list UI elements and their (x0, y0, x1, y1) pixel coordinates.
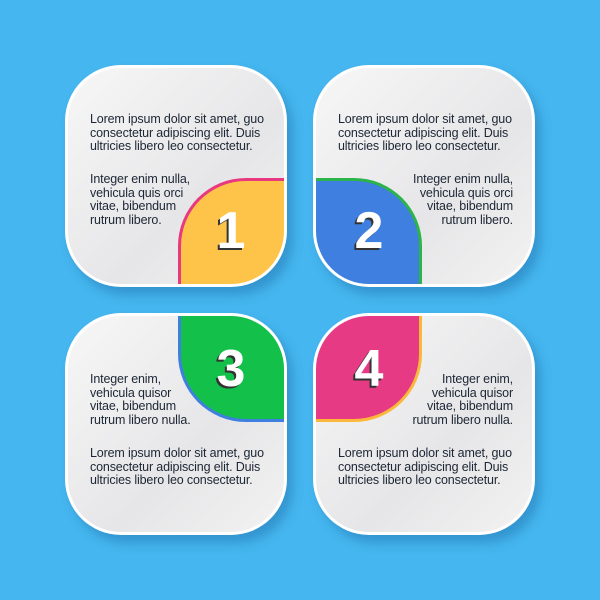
text block 1b: vitae, bibendum (90, 199, 176, 213)
text block 3a: vehicula quisor (90, 386, 171, 400)
text block 2b (413, 172, 513, 226)
quadrant 2 (316, 178, 422, 284)
card 2 (313, 65, 535, 287)
text block 2a: Lorem ipsum dolor sit amet, guo (338, 112, 512, 126)
text block 2b: vehicula quis orci (420, 186, 513, 200)
text block 3b: consectetur adipiscing elit. Duis (90, 460, 260, 474)
text block 2a (338, 112, 512, 153)
card 4 (313, 313, 535, 535)
quadrant 2: 2 (355, 202, 383, 260)
quadrant 3 (178, 316, 284, 422)
card 3 (65, 313, 287, 535)
text block 3a (90, 372, 191, 426)
text block 3a: Integer enim, (90, 372, 161, 386)
quadrant 1 (178, 178, 284, 284)
text block 2b: rutrum libero. (441, 212, 513, 226)
text block 3b: ultricies libero leo consectetur. (90, 473, 252, 487)
text block 4b: ultricies libero leo consectetur. (338, 473, 500, 487)
text block 2b: vitae, bibendum (427, 199, 513, 213)
text block 4a: vehicula quisor (432, 386, 513, 400)
text block 3a: rutrum libero nulla. (90, 412, 191, 426)
text block 3b (90, 446, 264, 487)
text block 1a: consectetur adipiscing elit. Duis (90, 126, 260, 140)
text block 1b: Integer enim nulla, (90, 172, 190, 186)
text block 4a: vitae, bibendum (427, 399, 513, 413)
text block 3a: vitae, bibendum (90, 399, 176, 413)
text block 1a: Lorem ipsum dolor sit amet, guo (90, 112, 264, 126)
quadrant 4: 4 (355, 340, 383, 398)
text block 1a: ultricies libero leo consectetur. (90, 139, 252, 153)
card 1 (65, 65, 287, 287)
text block 1a (90, 112, 264, 153)
text block 4a: rutrum libero nulla. (412, 412, 513, 426)
text block 4b: consectetur adipiscing elit. Duis (338, 460, 508, 474)
text block 4a: Integer enim, (442, 372, 513, 386)
text block 1b (90, 172, 190, 226)
text block 2b: Integer enim nulla, (413, 172, 513, 186)
text block 2a: ultricies libero leo consectetur. (338, 139, 500, 153)
text block 1b: vehicula quis orci (90, 186, 183, 200)
quadrant 1: 1 (217, 202, 245, 260)
text block 3b: Lorem ipsum dolor sit amet, guo (90, 446, 264, 460)
quadrant 4 (316, 316, 422, 422)
text block 4a (412, 372, 513, 426)
text block 4b: Lorem ipsum dolor sit amet, guo (338, 446, 512, 460)
text block 2a: consectetur adipiscing elit. Duis (338, 126, 508, 140)
text block 4b (338, 446, 512, 487)
text block 1b: rutrum libero. (90, 212, 162, 226)
quadrant 3: 3 (217, 340, 245, 398)
